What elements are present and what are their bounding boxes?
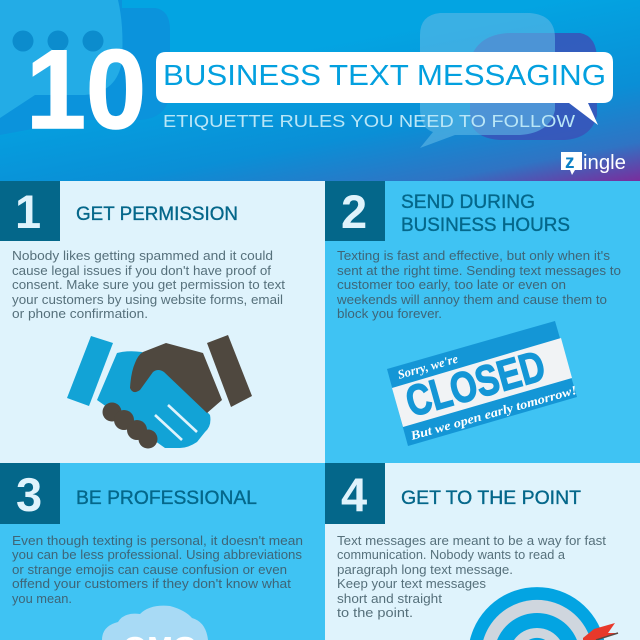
logo: Zingle	[561, 152, 626, 175]
big number 10: 10	[26, 27, 146, 152]
icon: cloud with text	[102, 606, 208, 640]
body text 2: block you forever.	[337, 306, 442, 321]
icon: target with arrow	[470, 587, 618, 640]
body text 2: Texting is fast and effective, but only when it's	[337, 248, 610, 263]
logo: Zingle: ingle	[583, 152, 626, 174]
body text 4	[337, 533, 606, 620]
panel 1: get permission	[0, 181, 325, 463]
panel 3: be professional	[0, 463, 325, 640]
number 3: 3	[16, 468, 42, 521]
body text 4: short and straight	[337, 591, 442, 606]
closed text: CLOSED	[401, 342, 550, 427]
body text 2: weekends will annoy them and cause them to	[336, 292, 607, 307]
body text 4: Keep your text messages	[337, 576, 486, 591]
panel 4: get to the point	[325, 463, 640, 640]
number 1: 1	[15, 185, 41, 238]
heading 4: GET TO THE POINT	[401, 487, 581, 509]
body text 4: paragraph long text message.	[337, 562, 513, 577]
heading 2: SEND DURING	[401, 191, 535, 213]
panel 2: send during business hours	[325, 181, 640, 463]
heading 2: BUSINESS HOURS	[401, 214, 570, 236]
sign small text top: Sorry, we're	[396, 352, 460, 382]
body text 4: to the point.	[337, 605, 413, 620]
sign small text bottom: But we open early tomorrow!	[408, 383, 579, 443]
number 1	[0, 181, 60, 241]
body text 1	[12, 248, 285, 321]
header banner	[0, 0, 640, 181]
subtitle: ETIQUETTE RULES YOU NEED TO FOLLOW	[163, 111, 576, 131]
number 4	[325, 463, 385, 524]
body text 3: you can be less professional. Using abbreviations	[12, 547, 302, 562]
number 2: 2	[341, 185, 367, 238]
body text 3: or strange emojis can cause confusion or even	[12, 562, 287, 577]
body text 3	[12, 533, 303, 606]
body text 1: or phone confirmation.	[12, 306, 148, 321]
icon: handshake	[67, 335, 252, 448]
heading 1: GET PERMISSION	[76, 203, 238, 225]
number 3	[0, 463, 60, 524]
title speech bubble	[156, 52, 613, 125]
logo: Zingle: z	[565, 152, 574, 173]
heading 3: BE PROFESSIONAL	[76, 487, 257, 509]
body text 4: Text messages are meant to be a way for fast	[337, 533, 606, 548]
body text 2: sent at the right time. Sending text messages to	[337, 263, 621, 278]
body text 1: consent. Make sure you get permission to text	[12, 277, 285, 292]
body text 1: your customers by using website forms, email	[12, 292, 283, 307]
title text: BUSINESS TEXT MESSAGING	[163, 60, 606, 92]
closed sign	[387, 321, 579, 446]
body text 4: communication. Nobody wants to read a	[337, 547, 566, 562]
body text 1: Nobody likes getting spammed and it could	[12, 248, 273, 263]
background chat bubbles	[0, 0, 597, 148]
body text 3: offend your customers if they don't know what	[12, 576, 291, 591]
body text 2: customer too early, too late or even on	[337, 277, 566, 292]
heading 2	[401, 191, 570, 236]
body text 3: Even though texting is personal, it doesn't mean	[12, 533, 303, 548]
body text 2	[336, 248, 621, 321]
number 2	[325, 181, 385, 241]
body text 1: cause legal issues if you don't have proof of	[12, 263, 271, 278]
body text 3: you mean.	[12, 591, 72, 606]
number 4: 4	[341, 468, 367, 521]
